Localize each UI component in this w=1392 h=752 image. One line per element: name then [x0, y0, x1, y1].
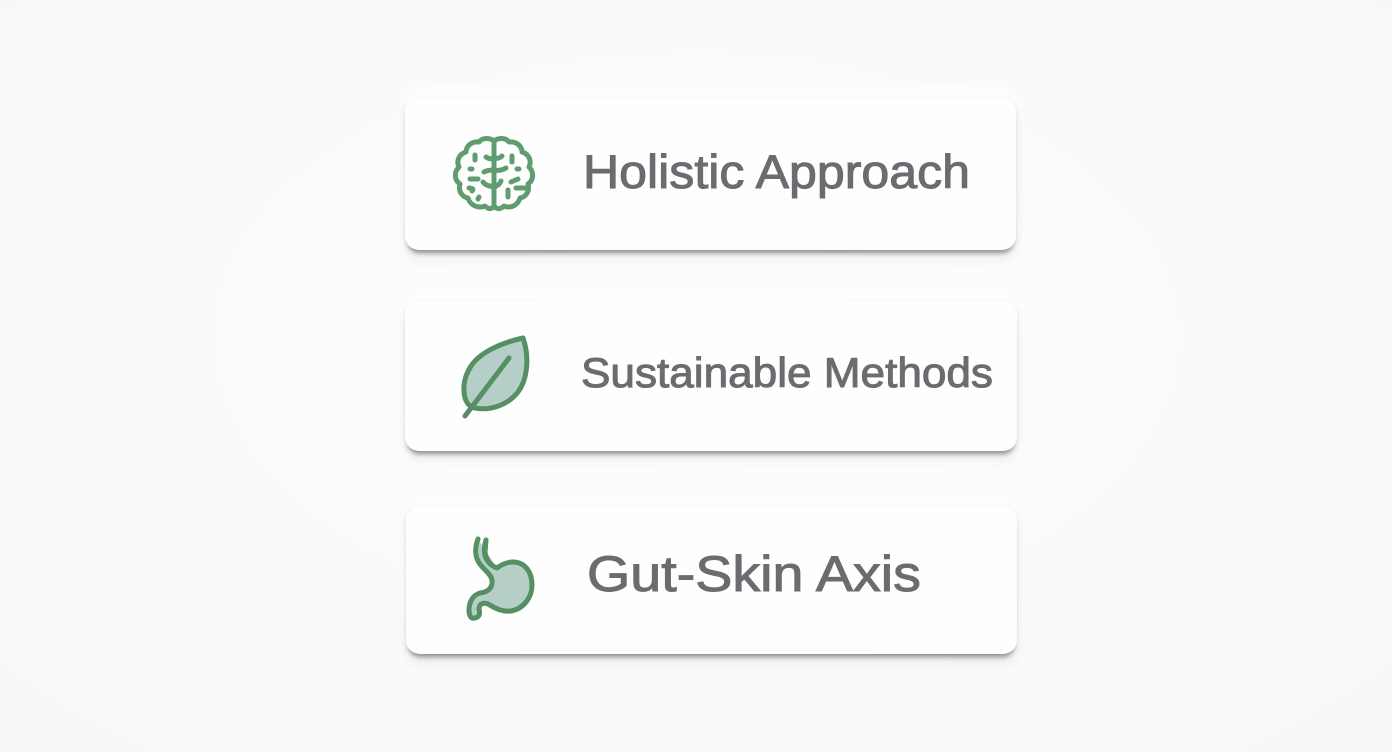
- icon: brain: [455, 138, 533, 209]
- icon: leaf: [464, 338, 527, 416]
- text: Holistic Approach: Holistic Approach: [583, 145, 970, 198]
- panel: gut-skin axis card: [406, 506, 1017, 654]
- text: Gut-Skin Axis: Gut-Skin Axis: [587, 546, 921, 602]
- panel: holistic approach card: [405, 98, 1016, 250]
- icon: stomach: [469, 539, 532, 618]
- panel: sustainable methods card: [405, 301, 1017, 451]
- text: Sustainable Methods: Sustainable Methods: [581, 349, 993, 396]
